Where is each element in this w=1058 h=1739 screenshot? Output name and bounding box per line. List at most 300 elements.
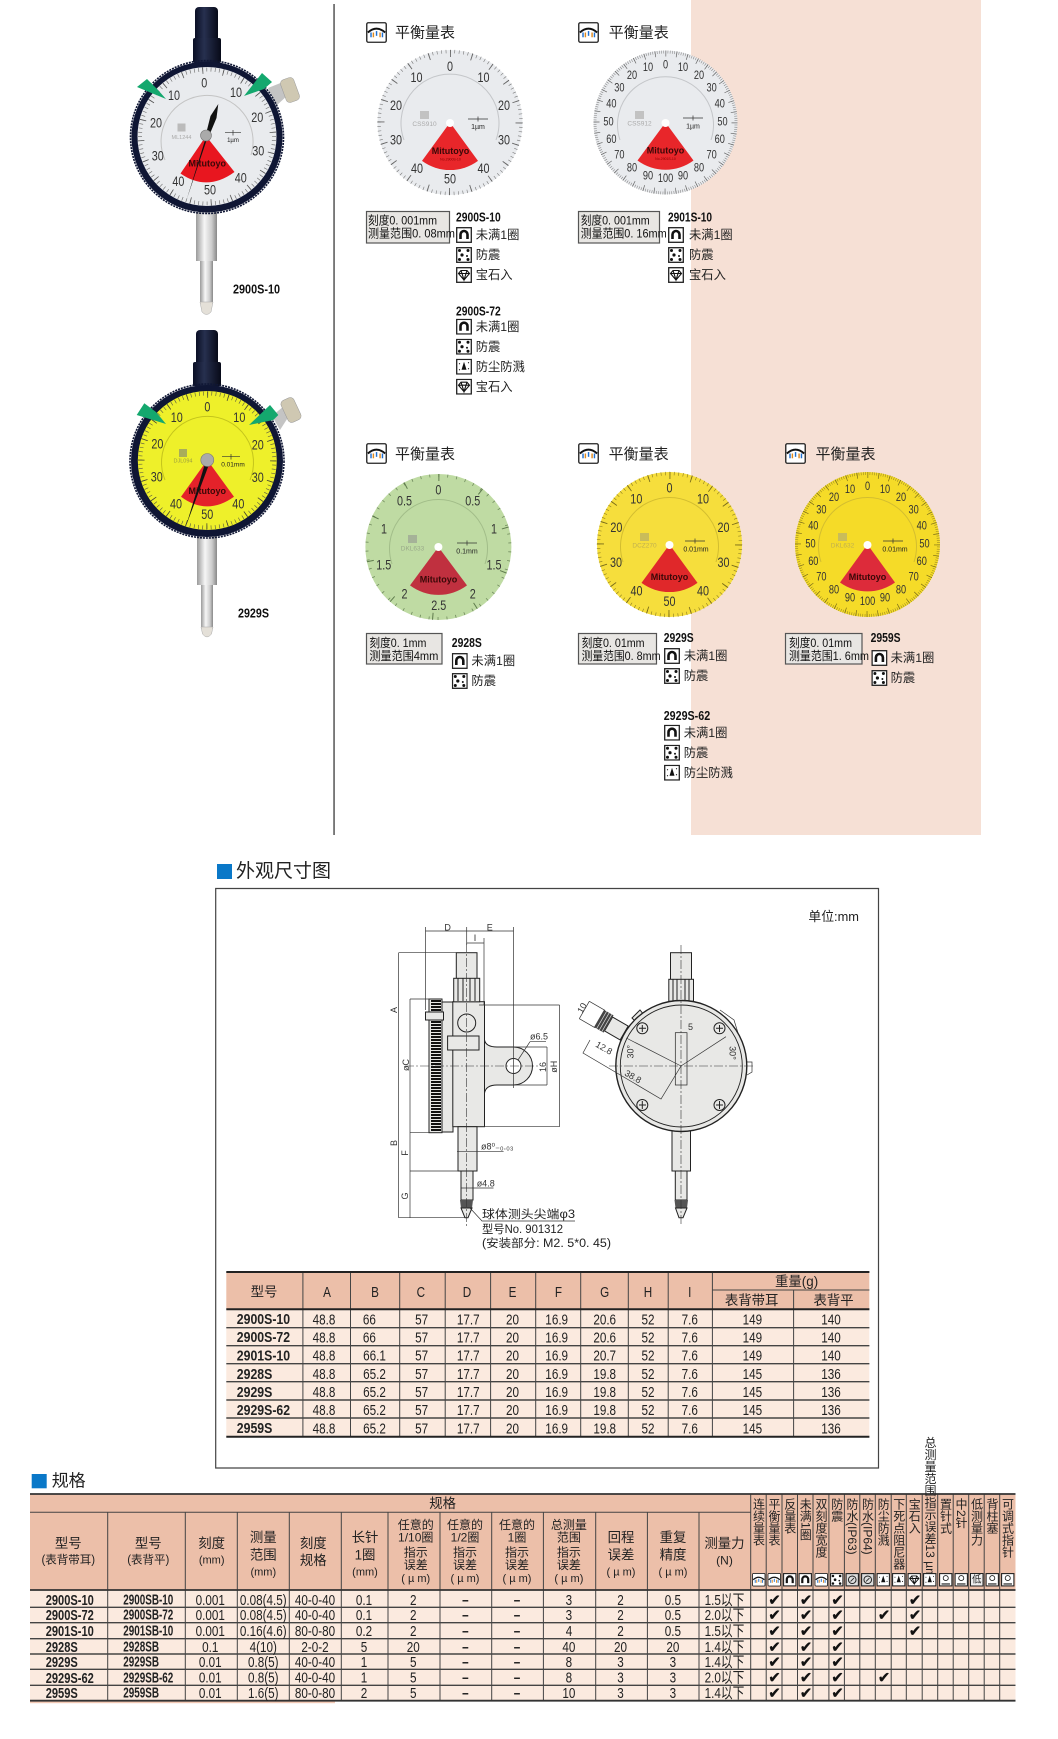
table: specifications: ✔ — [768, 1622, 781, 1640]
table: dimensions: 2928S — [237, 1366, 272, 1382]
table: dimensions: E — [509, 1284, 516, 1300]
note: contact point: 球体测头尖端φ3 — [482, 1207, 575, 1221]
table: dimensions: 16.9 — [545, 1366, 568, 1382]
table: specifications: 5 — [410, 1654, 417, 1670]
dial: 2959S yellow: 50 — [805, 538, 816, 551]
table: specifications: 0.8(5) — [248, 1654, 279, 1670]
dial: 2959S yellow: 90 — [845, 593, 855, 605]
table: specifications: – — [514, 1623, 521, 1639]
table: specifications: 0.2 — [356, 1623, 372, 1639]
note: contact point: 型号No. 901312 — [482, 1222, 563, 1236]
table: specifications: 刻度 — [198, 1536, 225, 1551]
table: specifications: – — [462, 1669, 469, 1686]
table: specifications: 5 — [361, 1639, 367, 1655]
table: specifications: 防水(IP63) — [845, 1497, 859, 1555]
table: dimensions: 7.6 — [682, 1402, 698, 1418]
panel: peach background — [691, 0, 981, 835]
label: 2900S-10: 2900S-10 — [233, 282, 280, 296]
table: specifications: ✔ — [831, 1638, 844, 1656]
table: dimensions: 149 — [743, 1311, 762, 1328]
table: specifications: 2900SB-10 — [123, 1592, 173, 1608]
table: specifications: 4(10) — [250, 1639, 277, 1655]
table: specifications: 2929S-62 — [46, 1669, 94, 1686]
dial: 2901S-10 white: 80 — [694, 163, 704, 175]
table: specifications: 1/2圈 — [451, 1531, 479, 1545]
table: dimensions: 17.7 — [457, 1311, 480, 1328]
table: dimensions: 52 — [641, 1420, 655, 1437]
table: specifications: 宝石入 — [907, 1498, 921, 1534]
table: specifications: 0.01 — [199, 1685, 222, 1701]
features: 2959S: 未满1圈 — [891, 651, 934, 665]
table: dimensions: I — [688, 1284, 691, 1300]
spec box: 2900S-10 — [366, 212, 455, 243]
icons: specification header row — [752, 1573, 1014, 1586]
dial: 2959S yellow: 20 — [829, 492, 839, 504]
dial: 2900S-10 white: 10 — [411, 70, 423, 85]
features: 2928S: 2928S — [452, 635, 482, 650]
table: dimensions: 136 — [821, 1384, 841, 1400]
features: 2929S: 2929S — [664, 630, 694, 645]
table: specifications: 防尘防溅 — [876, 1497, 890, 1546]
label: 2929S: 2929S — [238, 606, 269, 620]
table: specifications: (mm) — [352, 1567, 378, 1579]
dial: 2900S-10 white: No.2900S-10 — [440, 158, 461, 162]
table: dimensions: 136 — [821, 1420, 841, 1437]
heading: specifications — [32, 1472, 86, 1490]
dial: 2959S yellow — [795, 472, 940, 617]
table: specifications: ✔ — [909, 1622, 921, 1640]
table: specifications: 20 — [407, 1639, 420, 1655]
dial: 2901S-10 white: 50 — [717, 116, 728, 129]
table: specifications: 下死点阻尼器 — [892, 1498, 906, 1571]
photo: dial gauge 2900S-10: 1µm — [227, 138, 239, 144]
table: specifications: ( µ m) — [554, 1573, 583, 1585]
dial: 2900S-10 white: 20 — [498, 98, 510, 113]
features: 2900S-10: 2900S-10 — [456, 210, 501, 224]
table: specifications: 防水(IP64) — [860, 1497, 874, 1555]
dial: 2900S-10 white: 40 — [411, 161, 423, 176]
features: 2900S-10: 防震 — [476, 247, 500, 262]
dial: 2901S-10 white: 60 — [715, 134, 725, 146]
note: contact point — [482, 1207, 611, 1250]
table: specifications: ✔ — [800, 1606, 812, 1624]
table: dimensions: 表背平 — [814, 1293, 854, 1308]
dial: 2928S green: 2 — [402, 587, 408, 602]
heading: balance gauge 2 — [579, 23, 669, 42]
dial: 2929S yellow: 10 — [630, 491, 643, 507]
spec box: 2901S-10 — [578, 212, 667, 243]
table: dimensions: 19.8 — [593, 1420, 616, 1437]
table: specifications: 指示 — [453, 1544, 477, 1559]
table: specifications: 40-0-40 — [295, 1607, 335, 1623]
table: dimensions: G — [600, 1284, 609, 1300]
table: dimensions: 48.8 — [313, 1347, 335, 1364]
table: specifications: 5 — [410, 1685, 417, 1701]
drawing: back view — [575, 945, 754, 1225]
photo: dial gauge 2929S: 0.01mm — [221, 462, 245, 468]
table: specifications: 平衡量表 — [767, 1498, 781, 1546]
table: specifications: 型号 — [55, 1536, 82, 1551]
photo: dial gauge 2929S: 30 — [252, 470, 264, 485]
table: dimensions: 17.7 — [457, 1366, 480, 1382]
table: specifications: 2901SB-10 — [123, 1623, 173, 1639]
drawing: back view: 10 — [575, 1001, 589, 1015]
dial: 2901S-10 white: 70 — [614, 150, 625, 162]
spec box: 2929S — [578, 634, 661, 664]
table: specifications: 任意的 — [398, 1517, 434, 1532]
table: specifications: 4 — [566, 1623, 573, 1639]
table: specifications: 2 — [410, 1607, 417, 1623]
dial: 2959S yellow: Mitutoyo — [849, 572, 887, 582]
features: 2900S-72: 2900S-72 — [456, 304, 501, 318]
dial: 2928S green: Mitutoyo — [420, 574, 458, 584]
table: specifications: ✔ — [800, 1653, 812, 1671]
table: specifications: 80-0-80 — [295, 1685, 335, 1701]
dial: 2901S-10 white: 90 — [678, 171, 688, 183]
table: specifications: 2 — [617, 1623, 624, 1639]
table: specifications: ✔ — [909, 1606, 921, 1624]
features: 2929S-62: 未满1圈 — [684, 726, 727, 740]
table: specifications: 2900S-72 — [46, 1606, 94, 1624]
table: specifications: ( µ m) — [401, 1573, 430, 1585]
table: dimensions: 52 — [641, 1311, 655, 1328]
dial: 2901S-10 white: 30 — [614, 83, 625, 95]
table: specifications: ✔ — [768, 1653, 781, 1671]
table: dimensions: 48.8 — [313, 1366, 335, 1382]
table: dimensions: F — [555, 1284, 562, 1300]
table: specifications: 精度 — [660, 1548, 686, 1562]
spec box: 2901S-10: 测量范围0. 16mm — [581, 226, 667, 240]
table: specifications: 0.01 — [199, 1654, 222, 1670]
table: specifications: 回程 — [608, 1530, 634, 1545]
table: specifications: (N) — [716, 1554, 733, 1568]
table: specifications: 1.5以下 — [705, 1623, 744, 1639]
table: specifications: – — [462, 1654, 469, 1670]
dial: 2929S yellow: 30 — [718, 555, 730, 570]
dial: 2901S-10 white: 50 — [603, 116, 614, 129]
heading: specifications: 规格 — [52, 1472, 86, 1490]
table: specifications: ✔ — [831, 1684, 844, 1702]
photo: dial gauge 2900S-10 — [130, 7, 301, 314]
dial: 2959S yellow: DKL632 — [831, 542, 855, 550]
dial: 2928S green: 1 — [491, 522, 497, 537]
table: specifications: 2900SB-72 — [123, 1607, 173, 1623]
dial: 2900S-10 white — [378, 50, 522, 195]
table: specifications: 误差 — [557, 1558, 581, 1572]
drawing: side view: 16 — [538, 1062, 548, 1072]
dial: 2929S yellow — [597, 472, 742, 617]
note: contact point: (安装部分: M2. 5*0. 45) — [482, 1236, 611, 1250]
table: specifications: 2959S — [46, 1684, 78, 1702]
table: dimensions: 57 — [415, 1420, 428, 1437]
spec box: 2959S: 刻度0. 01mm — [789, 635, 852, 650]
table: dimensions: 136 — [821, 1366, 841, 1382]
table: dimensions: 149 — [743, 1347, 762, 1364]
table: specifications: 2 — [410, 1592, 417, 1608]
table: specifications: – — [514, 1685, 521, 1701]
table: specifications: ✔ — [831, 1622, 844, 1640]
dial: 2900S-10 white: 30 — [390, 132, 402, 148]
table: dimensions: A — [323, 1284, 331, 1300]
table: specifications: ✔ — [831, 1669, 844, 1687]
heading: balance gauge 4 — [579, 444, 669, 463]
table: specifications: (表背平) — [127, 1553, 170, 1567]
dial: 2928S green: 2 — [470, 587, 476, 602]
table: specifications: 20 — [666, 1639, 679, 1655]
table: specifications: (mm) — [199, 1555, 225, 1567]
table: specifications: ✔ — [800, 1591, 812, 1609]
drawing: side view: øC — [401, 1059, 411, 1071]
table: dimensions: C — [417, 1284, 425, 1300]
table: dimensions: B — [371, 1284, 379, 1300]
table: specifications: 总测量范围指示误差13 µm — [923, 1436, 937, 1578]
features: 2900S-10: 未满1圈 — [476, 228, 519, 242]
spec box: 2928S: 刻度0. 1mm — [369, 635, 426, 650]
table: specifications: 误差 — [608, 1548, 634, 1562]
table: specifications: 80-0-80 — [295, 1623, 335, 1639]
dial: 2929S yellow: 50 — [664, 594, 676, 609]
dial: 2900S-10 white: 10 — [478, 70, 490, 85]
table: specifications: 3 — [670, 1669, 676, 1686]
dial: 2928S green: DKL633 — [401, 546, 425, 552]
table: dimensions: 7.6 — [682, 1384, 698, 1400]
table: dimensions: 20 — [506, 1402, 519, 1418]
table: dimensions: 19.8 — [593, 1402, 616, 1418]
features: 2901S-10: 防震 — [689, 247, 714, 262]
dial: 2959S yellow: 10 — [880, 484, 890, 496]
heading: balance gauge 5 — [786, 444, 876, 463]
dial: 2901S-10 white: 100 — [658, 173, 673, 186]
drawing: side view: D — [444, 922, 451, 932]
table: dimensions: 20.6 — [593, 1311, 616, 1328]
table: specifications: ( µ m) — [607, 1567, 635, 1579]
table: dimensions: 20 — [506, 1329, 519, 1346]
table: specifications: ( µ m) — [451, 1573, 479, 1585]
dial: 2900S-10 white: 40 — [478, 161, 490, 176]
table: specifications: 2929S — [46, 1653, 78, 1671]
dial: 2928S green: 1 — [381, 522, 387, 537]
dial: 2901S-10 white: 30 — [707, 83, 717, 95]
table: specifications: 2.0以下 — [705, 1669, 744, 1686]
dial: 2901S-10 white: 10 — [678, 62, 688, 74]
spec box: 2928S — [366, 634, 442, 664]
table: specifications: 1.6(5) — [248, 1685, 279, 1701]
table: specifications: 可调式指针 — [1000, 1498, 1014, 1558]
dial: 2901S-10 white: 80 — [627, 163, 637, 175]
dial: 2959S yellow: 80 — [829, 585, 839, 597]
dial: 2901S-10 white: 40 — [606, 99, 617, 111]
dial: 2929S yellow: 40 — [697, 583, 709, 599]
table: specifications: 置针式 — [938, 1498, 952, 1534]
table: dimensions: 66 — [363, 1311, 376, 1328]
table: dimensions: 2900S-72 — [237, 1329, 290, 1346]
table: specifications: 2900S-10 — [46, 1591, 94, 1609]
spec box: 2900S-10: 刻度0. 001mm — [368, 212, 437, 228]
features: 2929S-62: 防尘防溅 — [684, 765, 733, 780]
table: dimensions: 140 — [821, 1329, 841, 1346]
table: specifications: 2 — [617, 1607, 624, 1623]
features: 2929S-62: 2929S-62 — [664, 708, 710, 723]
photo: dial gauge 2929S: 40 — [232, 497, 245, 512]
dial: 2959S yellow: 0 — [865, 481, 870, 494]
table: specifications: 40-0-40 — [295, 1592, 335, 1608]
photo: dial gauge 2900S-10: 40 — [172, 174, 185, 189]
photo: dial gauge 2900S-10: 50 — [204, 182, 216, 198]
table: dimensions: 140 — [821, 1311, 841, 1328]
table: dimensions: 表背带耳 — [725, 1293, 778, 1308]
table: specifications: ( µ m) — [503, 1573, 531, 1585]
features: 2900S-72 — [456, 304, 525, 394]
table: dimensions: 7.6 — [682, 1329, 698, 1346]
table: specifications: 3 — [566, 1592, 572, 1608]
table: specifications: 3 — [617, 1685, 624, 1701]
table: specifications: 1/10圈 — [398, 1531, 433, 1545]
dial: 2901S-10 white: 0 — [663, 59, 668, 72]
table: dimensions: 16.9 — [545, 1329, 568, 1346]
heading: balance gauge 1 — [367, 23, 455, 42]
table: dimensions: 66.1 — [363, 1347, 386, 1364]
table: specifications: 任意的 — [499, 1517, 535, 1532]
photo: dial gauge 2900S-10: 20 — [150, 116, 162, 131]
table: specifications: 1 — [361, 1669, 367, 1686]
table: dimensions: 52 — [641, 1402, 655, 1418]
photo: dial gauge 2900S-10: 30 — [152, 148, 164, 164]
table: specifications: – — [462, 1685, 469, 1701]
table: specifications: 0.5 — [665, 1607, 681, 1623]
table: specifications: 重复 — [660, 1529, 686, 1545]
dial: 2901S-10 white: 1µm — [686, 124, 700, 130]
drawing: side view: ø4.8 — [477, 1178, 495, 1188]
table: specifications: 10 — [562, 1685, 575, 1701]
drawing: side view: E — [487, 922, 493, 932]
features: 2959S: 防震 — [891, 670, 915, 685]
dial: 2928S green: 1.5 — [487, 557, 502, 573]
panel: dimension drawing frame — [216, 888, 878, 1468]
dial: 2959S yellow: 40 — [808, 521, 819, 533]
features: 2929S: 未满1圈 — [684, 649, 727, 663]
dial: 2929S yellow: 20 — [718, 520, 730, 535]
table: specifications: 0.1 — [356, 1592, 372, 1608]
photo: dial gauge 2900S-10: ML1244 — [172, 135, 191, 141]
table: dimensions: 2901S-10 — [237, 1347, 290, 1364]
table: specifications: ✔ — [831, 1606, 844, 1624]
spec box: 2901S-10: 刻度0. 001mm — [581, 212, 650, 228]
photo: dial gauge 2929S — [130, 330, 302, 637]
table: specifications: 1 — [361, 1654, 367, 1670]
dial: 2959S yellow: 50 — [919, 538, 930, 551]
heading: external dimensions: 外观尺寸图 — [236, 860, 331, 882]
table: dimensions: 20 — [506, 1347, 519, 1364]
table: dimensions: 20.7 — [593, 1347, 616, 1364]
spec box: 2929S: 测量范围0. 8mm — [582, 649, 661, 663]
dial: 2928S green: 0.5 — [465, 493, 480, 509]
table: specifications: 2929SB-62 — [123, 1669, 173, 1686]
dial: 2959S yellow: 70 — [909, 572, 919, 584]
table: specifications: 指示 — [557, 1544, 581, 1559]
table: specifications: 3 — [617, 1654, 624, 1670]
table: dimensions: 65.2 — [363, 1384, 386, 1400]
table: specifications: 低测量力 — [970, 1498, 984, 1547]
features: 2900S-72: 未满1圈 — [476, 320, 519, 334]
spec box: 2959S — [786, 634, 869, 664]
photo: dial gauge 2929S: DJL094 — [174, 458, 192, 464]
table: specifications: 8 — [566, 1654, 572, 1670]
photo: dial gauge 2900S-10: 20 — [251, 110, 264, 125]
table: dimensions: 20 — [506, 1366, 519, 1382]
table: specifications: ✔ — [800, 1622, 812, 1640]
spec box: 2929S: 刻度0. 01mm — [582, 635, 645, 650]
dial: 2959S yellow: 80 — [896, 585, 906, 597]
table: dimensions: 重量(g) — [775, 1274, 818, 1289]
table: specifications: ✔ — [831, 1653, 844, 1671]
photo: dial gauge 2900S-10: 10 — [230, 85, 242, 100]
table: specifications: – — [514, 1654, 521, 1670]
dial: 2900S-10 white: Mitutoyo — [432, 146, 470, 156]
features: 2901S-10: 未满1圈 — [689, 228, 733, 242]
table: specifications: 长针 — [352, 1530, 378, 1545]
drawing: back view: 12.8 — [594, 1039, 614, 1057]
table: specifications — [30, 1436, 1016, 1703]
table: specifications: 0.8(5) — [248, 1669, 279, 1686]
features: 2900S-72: 宝石入 — [476, 380, 513, 394]
table: specifications: 2959SB — [123, 1685, 159, 1701]
table: specifications: 测量 — [250, 1530, 277, 1545]
table: dimensions: 7.6 — [682, 1366, 698, 1382]
table: specifications: 中2针 — [954, 1497, 968, 1529]
table: dimensions: D — [463, 1284, 472, 1300]
table: specifications: 未满1圈 — [798, 1498, 812, 1541]
features: 2959S: 2959S — [871, 630, 901, 645]
table: specifications: 1圈 — [508, 1531, 526, 1545]
dial: 2959S yellow: 0.01mm — [882, 546, 908, 554]
drawing: side view: A — [389, 1007, 399, 1013]
features: 2928S: 防震 — [471, 673, 496, 688]
table: specifications: 2928SB — [123, 1639, 159, 1655]
drawing: back view: 30° — [728, 1046, 738, 1060]
photo: dial gauge 2900S-10: 30 — [252, 143, 265, 159]
dial: 2901S-10 white: CSS912 — [627, 120, 652, 128]
dial: 2959S yellow: 100 — [860, 596, 875, 608]
table: dimensions: 16.9 — [545, 1420, 568, 1437]
dial: 2928S green — [365, 474, 511, 620]
spec box: 2900S-10: 测量范围0. 08mm — [368, 226, 455, 240]
table: specifications: 20 — [614, 1639, 627, 1655]
dial: 2959S yellow: 30 — [909, 505, 919, 517]
dial: 2900S-10 white: 20 — [390, 98, 402, 113]
table: specifications: – — [514, 1639, 521, 1655]
table: dimensions: 52 — [641, 1347, 655, 1364]
table: specifications: 0.1 — [202, 1639, 218, 1655]
spec box: 2928S: 测量范围4mm — [369, 649, 438, 663]
table: dimensions: 17.7 — [457, 1402, 480, 1418]
table: dimensions: 2929S-62 — [237, 1402, 290, 1418]
drawing: side view: ø6.5 — [530, 1032, 548, 1042]
divider: vertical rule — [333, 4, 335, 835]
table: dimensions: 20.6 — [593, 1329, 616, 1346]
table: dimensions: 2959S — [237, 1420, 272, 1437]
table: specifications: 规格 — [300, 1553, 327, 1568]
table: specifications: 刻度 — [300, 1536, 327, 1551]
features: 2900S-10: 宝石入 — [476, 268, 513, 282]
dial: 2928S green: 0.5 — [397, 493, 412, 509]
drawing: side view: I — [474, 933, 476, 943]
table: specifications: 范围 — [557, 1531, 581, 1545]
table: specifications: – — [514, 1592, 521, 1608]
dial: 2959S yellow: 40 — [917, 521, 927, 533]
table: specifications: 3 — [670, 1654, 676, 1670]
table: specifications: 0.16(4.6) — [240, 1623, 287, 1639]
table: specifications: 40-0-40 — [295, 1654, 335, 1670]
